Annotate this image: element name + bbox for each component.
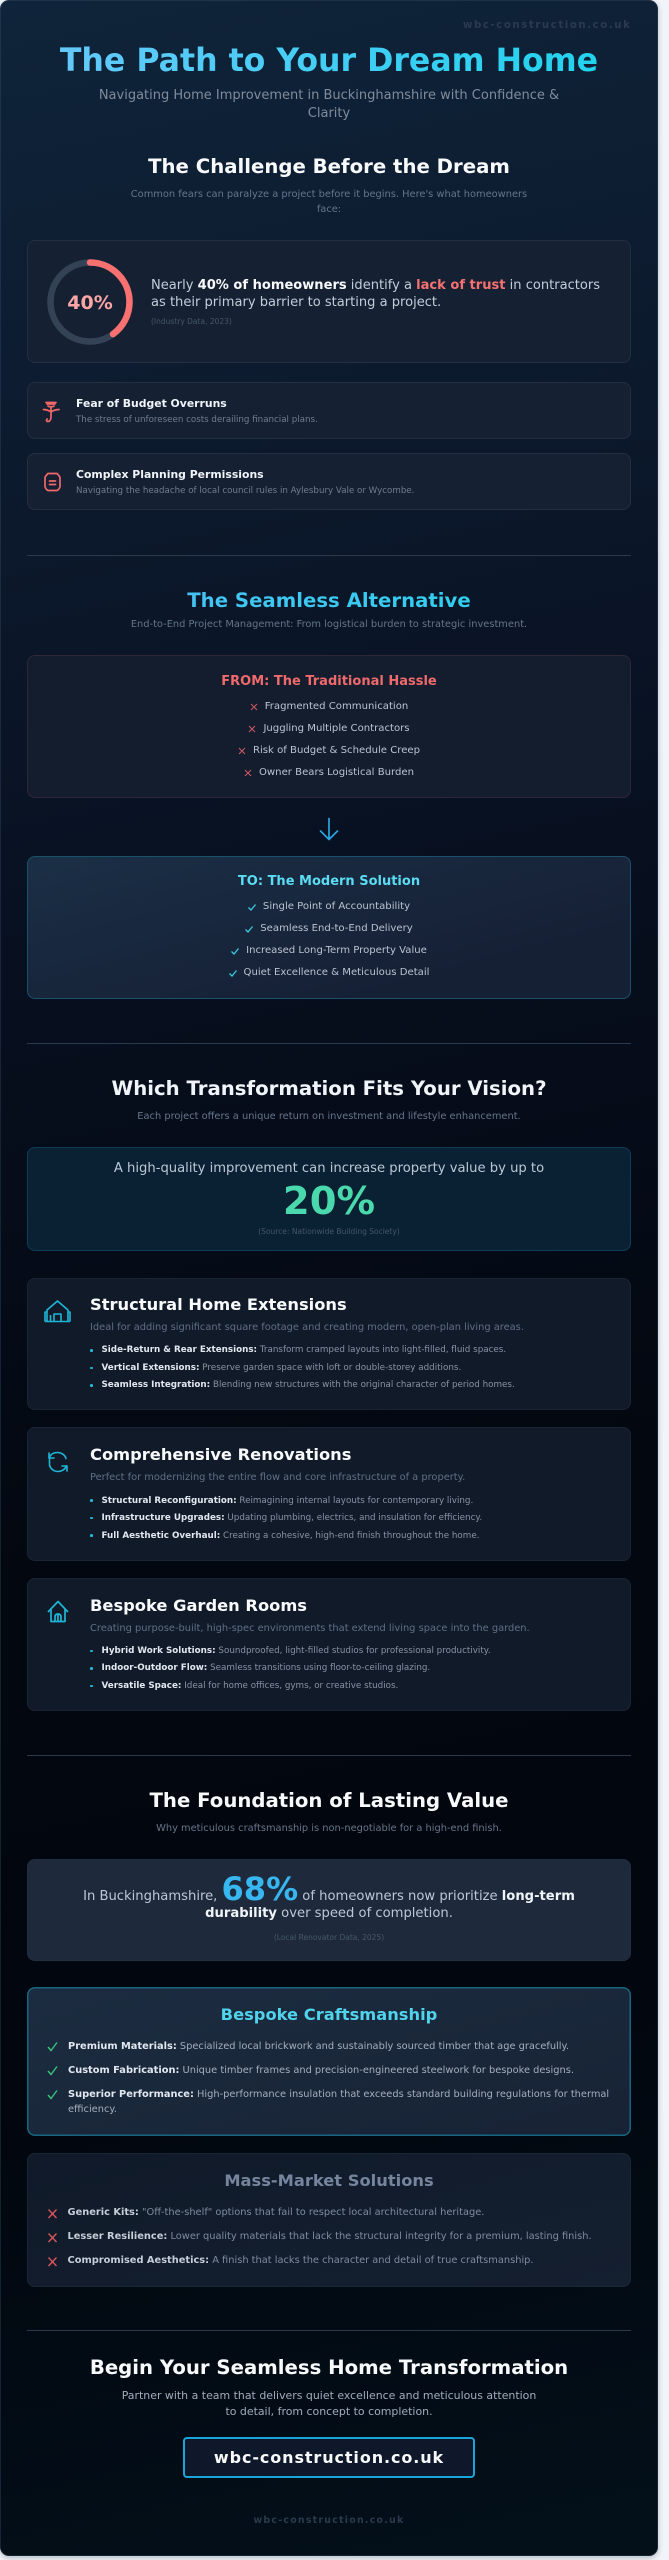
card: structural home extensions (27, 1278, 631, 1410)
icon: document (44, 472, 61, 492)
call to action text: Partner with a team that delivers quiet excellence and meticulous attention (122, 2389, 536, 2402)
to item: Increased Long-Term Property Value (246, 945, 427, 956)
call to action text: to detail, from concept to completion. (225, 2404, 433, 2418)
card: bespoke garden rooms (27, 1578, 631, 1711)
bespoke heading: Bespoke Craftsmanship (221, 2005, 437, 2024)
button: website: wbc-construction.co.uk (214, 2448, 444, 2467)
subtitle (99, 88, 559, 120)
icon: house extension (44, 1300, 71, 1322)
call to action text (0, 2388, 658, 2419)
mass-market item: Compromised Aesthetics: A finish that lacks the character and detail of true craftsmanship. (68, 2254, 534, 2266)
bullet dot (90, 1384, 93, 1387)
value text: A high-quality improvement can increase property value by up to (114, 1161, 544, 1176)
value source: (Source: Nationwide Building Society) (258, 1227, 400, 1236)
bullet: Hybrid Work Solutions: Soundproofed, light-filled studios for professional productivity. (102, 1646, 491, 1656)
fear title: Complex Planning Permissions (76, 468, 264, 481)
panel: 40% statistic (27, 240, 631, 363)
fear title: Fear of Budget Overruns (76, 396, 227, 410)
from item: Risk of Budget & Schedule Creep (253, 745, 420, 756)
bullet: Full Aesthetic Overhaul: Creating a cohesive, high-end finish throughout the home. (102, 1530, 479, 1540)
to item: Quiet Excellence & Meticulous Detail (244, 967, 429, 978)
challenge intro: face: (317, 204, 341, 215)
from item: Fragmented Communication (265, 701, 408, 712)
button: website (183, 2437, 475, 2478)
bullet dot (90, 1684, 93, 1687)
durability text: durability over speed of completion. (205, 1906, 453, 1920)
to heading: TO: The Modern Solution (238, 874, 420, 889)
card title: Structural Home Extensions (90, 1295, 347, 1314)
fear description: The stress of unforeseen costs derailing financial plans. (76, 414, 318, 424)
footer watermark: wbc-construction.co.uk (254, 2515, 404, 2526)
check (48, 2042, 58, 2052)
heading: transformation: Which Transformation Fits Your Vision? (112, 1077, 546, 1100)
check (48, 2090, 58, 2100)
panel: mass-market solutions (27, 2153, 631, 2287)
alternative intro: End-to-End Project Management: From logistical burden to strategic investment. (131, 619, 527, 630)
subtitle: Navigating Home Improvement in Buckinghamshire with Confidence & (99, 88, 559, 103)
from item: Juggling Multiple Contractors (263, 723, 410, 734)
subtitle: Clarity (308, 106, 350, 120)
from heading: FROM: The Traditional Hassle (221, 674, 437, 688)
challenge intro (131, 189, 527, 215)
bespoke item: Custom Fabrication: Unique timber frames and precision-engineered steelwork for bespoke designs. (68, 2064, 574, 2076)
mass-market heading: Mass-Market Solutions (224, 2171, 434, 2190)
bullet dot (90, 1349, 93, 1352)
card description: Perfect for modernizing the entire flow and core infrastructure of a property. (90, 1472, 465, 1483)
bespoke item: Premium Materials: Specialized local brickwork and sustainably sourced timber that age gracefully. (68, 2040, 569, 2052)
foundation intro: Why meticulous craftsmanship is non-negotiable for a high-end finish. (156, 1823, 502, 1834)
check (48, 2066, 58, 2076)
top watermark: wbc-construction.co.uk (463, 20, 631, 31)
cross (48, 2209, 57, 2218)
from item: Owner Bears Logistical Burden (259, 767, 414, 778)
bullet dot (90, 1366, 93, 1369)
panel: from traditional hassle (27, 655, 631, 798)
bullet: Structural Reconfiguration: Reimagining internal layouts for contemporary living. (102, 1496, 473, 1506)
panel: to modern solution (27, 856, 631, 998)
bullet: Indoor-Outdoor Flow: Seamless transitions using floor-to-ceiling glazing. (102, 1663, 430, 1673)
icon: renovation cycle (48, 1452, 68, 1472)
bespoke item: efficiency. (68, 2104, 117, 2114)
icon: garden room (48, 1600, 68, 1622)
heading: call to action: Begin Your Seamless Home Transformation (90, 2356, 568, 2379)
statistic text (151, 278, 600, 310)
mass-market item: Generic Kits: "Off-the-shelf" options that fail to respect local architectural heritage. (68, 2206, 484, 2218)
bullet: Vertical Extensions: Preserve garden space with loft or double-storey additions. (102, 1362, 461, 1372)
to item: Single Point of Accountability (263, 901, 410, 912)
cross (47, 2256, 58, 2267)
durability text: In Buckinghamshire, 68% of homeowners now prioritize long-term (83, 1870, 575, 1908)
bespoke item: Superior Performance: High-performance insulation that exceeds standard building regulations for thermal (68, 2088, 609, 2100)
fear description: Navigating the headache of local council rules in Aylesbury Vale or Wycombe. (76, 486, 414, 496)
statistic text: as their primary barrier to starting a project. (151, 295, 441, 310)
bullet dot (90, 1667, 93, 1670)
card title: Bespoke Garden Rooms (90, 1596, 307, 1614)
card description: Ideal for adding significant square footage and creating modern, open-plan living areas. (90, 1322, 524, 1332)
card: comprehensive renovations (27, 1427, 631, 1561)
title: The Path to Your Dream Home (60, 43, 598, 79)
card title: Comprehensive Renovations (90, 1445, 351, 1464)
panel: planning permissions (27, 453, 631, 510)
bullet dot (90, 1516, 93, 1519)
bullet: Side-Return & Rear Extensions: Transform cramped layouts into light-filled, fluid spaces. (102, 1345, 506, 1355)
bullet: Infrastructure Upgrades: Updating plumbing, electrics, and insulation for efficiency. (102, 1513, 482, 1523)
donut chart: 40% (47, 259, 133, 345)
bullet: Seamless Integration: Blending new structures with the original character of period homes. (102, 1380, 515, 1390)
bullet: Versatile Space: Ideal for home offices, gyms, or creative studios. (102, 1680, 398, 1690)
statistic source: (Industry Data, 2023) (151, 317, 232, 326)
card description: Creating purpose-built, high-spec environments that extend living space into the garden. (90, 1622, 530, 1634)
bullet dot (90, 1650, 93, 1652)
mass-market item: Lesser Resilience: Lower quality materials that lack the structural integrity for a premium, lasting finish. (68, 2230, 592, 2242)
value number: 20% (283, 1179, 375, 1224)
bullet dot (90, 1534, 93, 1537)
icon: rupee hand (42, 402, 60, 422)
donut chart: 40%: 40% (67, 292, 113, 314)
heading: foundation: The Foundation of Lasting Value (150, 1789, 508, 1812)
heading: challenge: The Challenge Before the Dream (148, 155, 510, 178)
challenge intro: Common fears can paralyze a project before it begins. Here's what homeowners (131, 189, 527, 200)
durability source: (Local Renovator Data, 2025) (274, 1932, 384, 1942)
panel: 68% durability statistic (27, 1858, 631, 1960)
cross (48, 2233, 57, 2242)
bullet dot (90, 1499, 93, 1502)
panel: budget fear (27, 382, 631, 439)
panel: bespoke craftsmanship (27, 1987, 631, 2136)
panel: 20% value statistic (27, 1147, 631, 1251)
bespoke item (68, 2088, 609, 2114)
to item: Seamless End-to-End Delivery (260, 923, 413, 934)
arrow: from to (320, 818, 338, 840)
transformation intro: Each project offers a unique return on investment and lifestyle enhancement. (137, 1111, 521, 1122)
statistic text: Nearly 40% of homeowners identify a lack of trust in contractors (151, 278, 600, 292)
heading: seamless alternative: The Seamless Alternative (187, 589, 471, 612)
